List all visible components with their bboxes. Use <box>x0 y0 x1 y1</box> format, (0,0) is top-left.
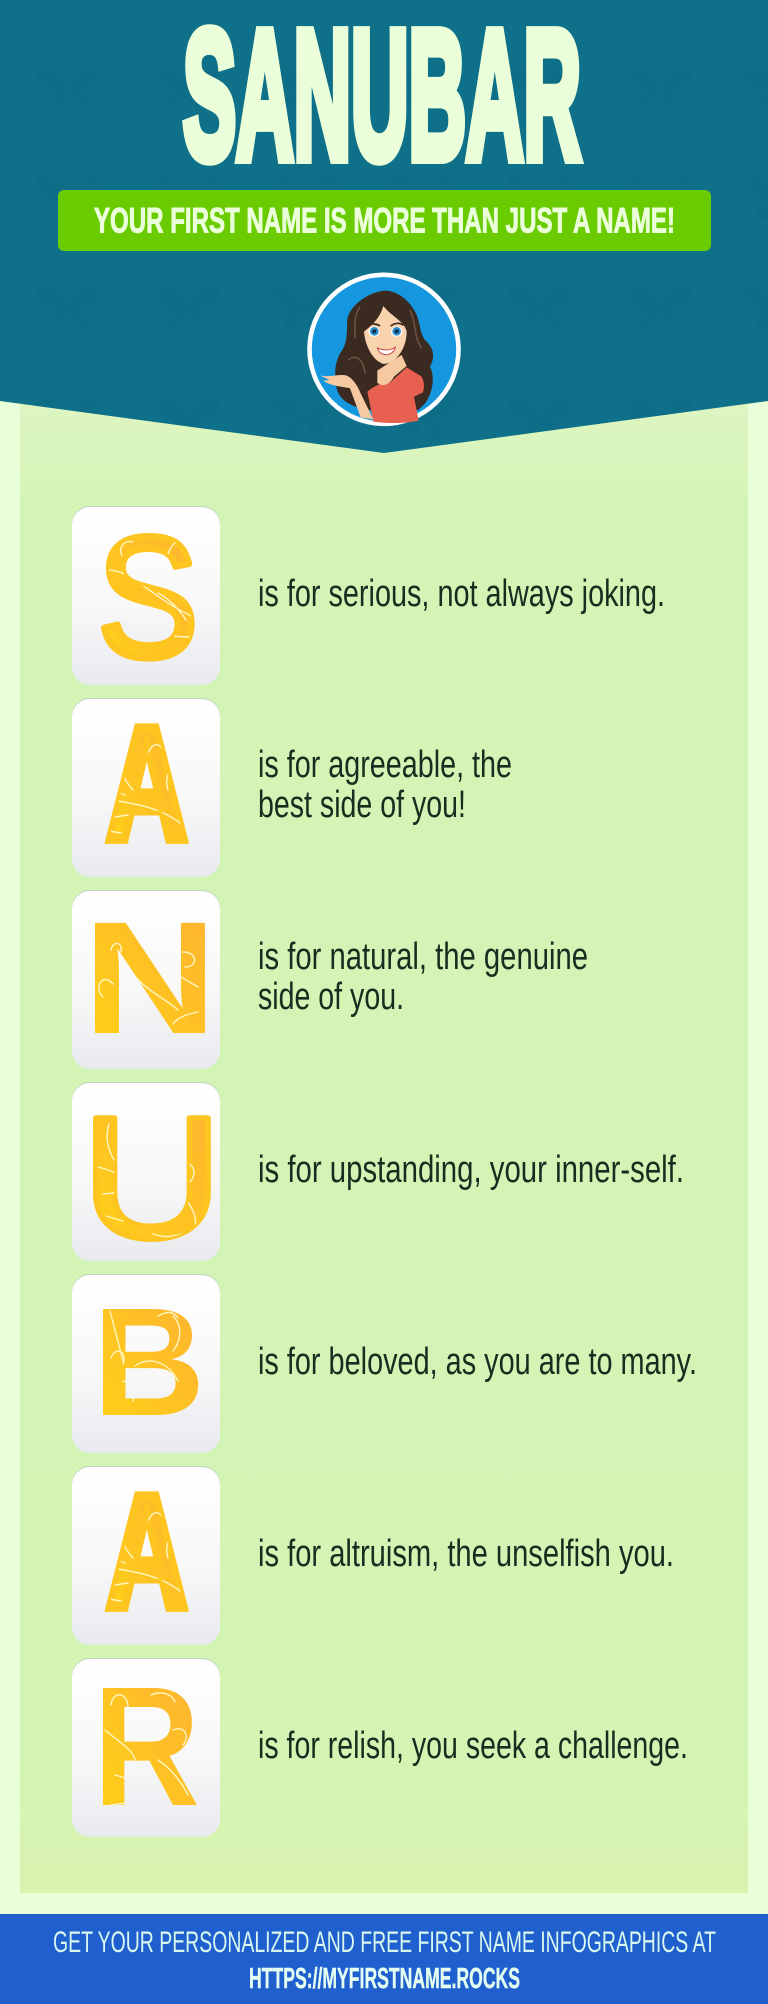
letter R <box>103 1688 197 1805</box>
text: A line <box>258 744 512 826</box>
footer <box>0 1914 768 2004</box>
text: N line <box>258 936 588 1018</box>
subtitle banner <box>58 190 711 251</box>
text: N line: side of you. <box>258 976 404 1018</box>
row: A second <box>72 1462 220 1645</box>
tile A <box>72 698 220 877</box>
row: N <box>72 888 220 1069</box>
row: B <box>72 1274 220 1453</box>
letter A <box>104 723 190 844</box>
letter A: A <box>106 1462 187 1642</box>
tile S <box>72 506 220 685</box>
letter B: B <box>93 1276 205 1448</box>
footer url: HTTPS://MYFIRSTNAME.ROCKS <box>249 1963 520 1995</box>
tile B <box>72 1274 220 1453</box>
row: R <box>72 1651 220 1841</box>
letter A: A <box>106 694 187 874</box>
tile A <box>72 1466 220 1645</box>
text: A line: is for agreeable, the <box>258 744 512 786</box>
letter N <box>95 922 205 1033</box>
text: A line: best side of you! <box>258 784 466 826</box>
letter R: R <box>93 1651 200 1841</box>
icon: woman avatar <box>310 275 458 424</box>
letter S: S <box>97 502 199 694</box>
letter U: U <box>81 1081 223 1275</box>
tile R <box>72 1658 220 1837</box>
row: U <box>72 1081 223 1275</box>
letter A <box>104 1491 190 1612</box>
letter S <box>101 533 195 662</box>
letter U <box>93 1115 211 1242</box>
row: A <box>72 694 220 877</box>
letter N: N <box>82 888 218 1067</box>
panel: letters background <box>20 380 748 1893</box>
tile U <box>72 1082 220 1261</box>
letter B <box>103 1309 198 1415</box>
text: N line: is for natural, the genuine <box>258 936 588 978</box>
header banner <box>0 0 768 453</box>
row: S <box>72 502 220 694</box>
tile N <box>72 890 220 1069</box>
